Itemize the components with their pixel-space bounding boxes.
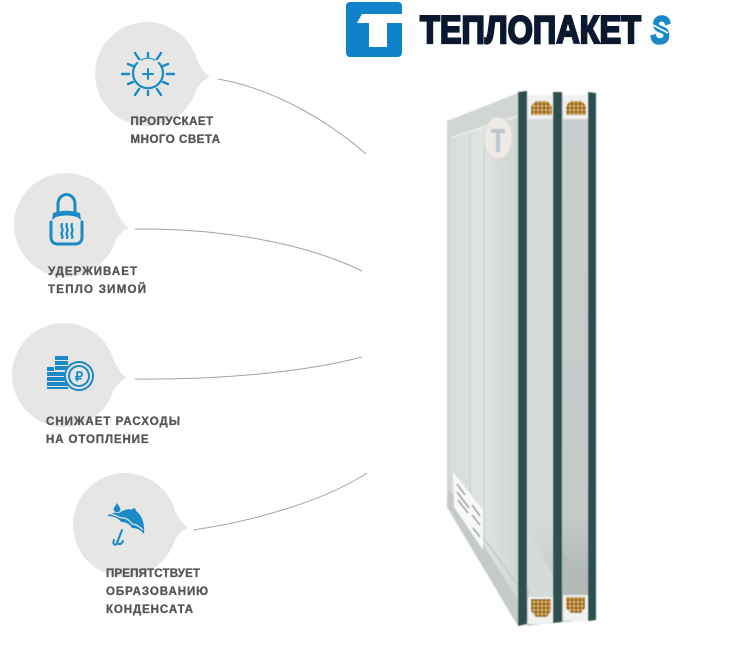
icon: coins with rouble: ₽ <box>75 369 84 384</box>
label <box>48 266 146 296</box>
air gaps between panes <box>527 96 588 626</box>
label <box>106 568 208 616</box>
icon: umbrella with drop <box>107 503 144 545</box>
label: НА ОТОПЛЕНИЕ <box>46 434 149 446</box>
triple glazed window unit <box>447 91 596 626</box>
label: СНИЖАЕТ РАСХОДЫ <box>46 416 180 428</box>
label <box>46 416 180 446</box>
label: ОБРАЗОВАНИЮ <box>106 586 208 598</box>
connector line <box>218 79 366 154</box>
icon: thermal lock <box>51 194 82 244</box>
bubble <box>95 22 210 126</box>
glass panes <box>518 91 596 626</box>
label: КОНДЕНСАТА <box>106 604 193 616</box>
logo: Teplopaket S <box>346 2 670 57</box>
round hologram sticker <box>484 117 512 159</box>
callout: keeps warmth in winter <box>14 173 362 296</box>
bubble <box>73 473 188 577</box>
callout: prevents condensation <box>73 473 367 616</box>
label: ПРОПУСКАЕТ <box>130 116 213 128</box>
callout: reduces heating costs <box>12 323 362 446</box>
bottom spacers with desiccant <box>528 595 588 624</box>
bubble <box>12 323 127 427</box>
connector line <box>135 229 362 271</box>
connector line <box>135 357 362 379</box>
top spacers with desiccant <box>528 95 588 119</box>
label: ПРЕПЯТСТВУЕТ <box>106 568 200 580</box>
side face of glass unit <box>447 93 518 626</box>
label: УДЕРЖИВАЕТ <box>48 266 137 278</box>
logo mark <box>346 2 402 57</box>
label: ТЕПЛО ЗИМОЙ <box>48 283 146 296</box>
label <box>130 116 220 146</box>
bubble <box>14 173 129 277</box>
icon: sun <box>122 53 174 95</box>
logo letter S: S <box>651 10 670 52</box>
connector line <box>193 473 367 530</box>
label: МНОГО СВЕТА <box>130 134 220 146</box>
icon: coins with rouble <box>47 356 93 390</box>
product label sticker <box>453 472 483 550</box>
logo wordmark: ТЕПЛОПАКЕТ <box>420 9 641 52</box>
callout: lets in much light <box>95 22 366 154</box>
